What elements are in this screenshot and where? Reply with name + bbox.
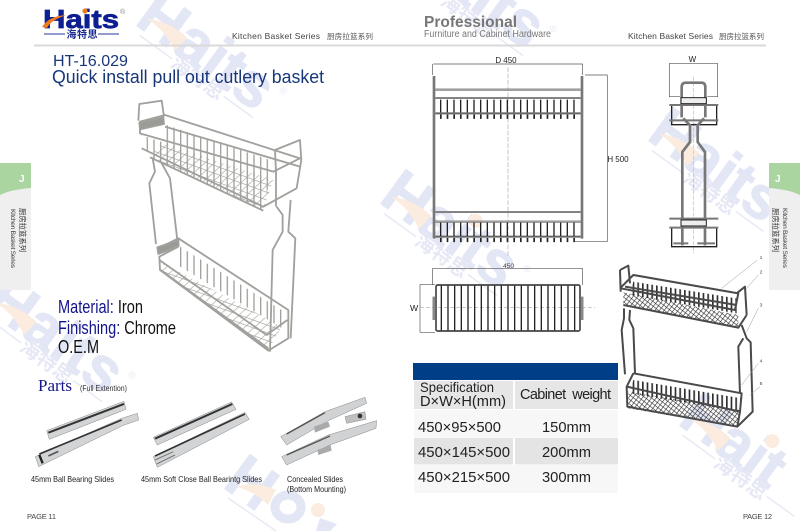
specification table: 450×215×500 [418, 469, 510, 486]
watermark: bottom left page: H [213, 442, 290, 524]
table header band [413, 363, 618, 380]
material list: Material: Iron [58, 297, 143, 317]
logo: Haits [42, 4, 126, 41]
side tab: left: Kitchen Basket Series [9, 209, 16, 269]
drawing: side view: W [689, 55, 697, 64]
watermark: top centre: 海特思 [167, 51, 229, 105]
parts heading: (Full Extention) [80, 383, 127, 393]
part captions: 45mm Ball Bearing Slides [31, 474, 114, 484]
header: right series label [628, 31, 764, 41]
specification table: 200mm [542, 444, 591, 461]
drawing: front view: H 500 [607, 155, 629, 164]
drawing: isometric view with numbered parts: 2 [760, 269, 763, 275]
header: Professional: Professional [424, 14, 517, 31]
part: 45mm soft close slides [153, 402, 249, 467]
specification table: Specification [420, 379, 494, 395]
drawing: isometric view with numbered parts: 5 [760, 381, 763, 387]
watermark: bottom left page [213, 442, 337, 531]
page number: 11: PAGE 11 [27, 512, 56, 521]
side tab: left: 厨房拉篮系列 [18, 208, 27, 252]
header rule [34, 44, 766, 46]
logo: Haits: Haits [43, 4, 119, 34]
side tab: right: Kitchen Basket Series [781, 208, 788, 269]
title [52, 53, 324, 87]
drawing: isometric view with numbered parts [620, 255, 763, 427]
part: 45mm ball bearing slides [35, 401, 139, 467]
part captions: (Bottom Mounting) [287, 484, 346, 494]
drawing: isometric view with numbered parts: 3 [760, 303, 763, 309]
watermark: bottom right page: Hait [669, 380, 800, 501]
title: HT-16.029 [53, 53, 128, 70]
material list [58, 297, 176, 357]
part captions: Concealed Slides [287, 474, 343, 484]
header: Professional: Furniture and Cabinet Hardware [424, 29, 551, 40]
watermark: upper right: 海特思 [679, 166, 741, 220]
watermark: left: 海特思 [16, 335, 78, 389]
watermark: middle right page: Haits [369, 157, 532, 302]
header: right series label: Kitchen Basket Series [628, 31, 713, 41]
specification table: 150mm [542, 419, 591, 436]
header: left series label [232, 31, 373, 41]
parts heading [38, 376, 127, 395]
page number: 12: PAGE 12 [743, 512, 772, 521]
parts heading: Parts [38, 376, 72, 395]
drawing: isometric view with numbered parts: 4 [760, 359, 763, 365]
header: right series label: 厨房拉篮系列 [719, 31, 764, 41]
drawing: front view [433, 56, 629, 257]
drawing: side view [669, 55, 718, 253]
header: Professional [424, 14, 551, 40]
title: Quick install pull out cutlery basket [52, 66, 324, 87]
material list: Finishing: Chrome [58, 318, 176, 338]
side tab: right: J [775, 174, 781, 185]
material list: O.E.M [58, 337, 99, 357]
logo: Haits: ® [120, 8, 126, 16]
watermark: left: ® [125, 369, 138, 383]
part captions: 45mm Soft Close Ball Bearintg Slides [141, 474, 262, 484]
drawing: top view: W [410, 303, 419, 313]
leader lines [722, 260, 760, 395]
drawing: top view: 450 [503, 263, 514, 270]
watermark: middle right page: 海特思 [411, 229, 473, 283]
part: concealed slides [281, 397, 377, 465]
logo: Haits: 海特思 [66, 28, 98, 41]
side tab: left: J [19, 174, 25, 185]
watermark: upper right: Haits [638, 95, 796, 235]
specification table: 300mm [542, 469, 591, 486]
specification table: 450×95×500 [418, 419, 501, 436]
drawing: top view [410, 263, 595, 332]
watermark: bottom right page: 海特思 [710, 451, 772, 505]
watermark: top centre: ® [276, 85, 289, 99]
specification table: Cabinet weight [520, 387, 611, 403]
drawing: front view: D 450 [495, 56, 517, 65]
specification table: D×W×H(mm) [420, 394, 506, 410]
watermark: middle right page: ® [520, 263, 533, 277]
side tab: left [0, 163, 31, 290]
header: left series label: Kitchen Basket Series [232, 31, 320, 41]
side tab: right: 厨房拉篮系列 [771, 208, 780, 252]
header: left series label: 厨房拉篮系列 [327, 31, 373, 41]
watermark: top of right page: ® [546, 23, 559, 37]
specification table: 450×145×500 [418, 444, 510, 461]
part numbers: 1 [760, 255, 763, 261]
specification table [413, 363, 618, 493]
part captions [31, 474, 346, 494]
product photo: cutlery basket [138, 101, 301, 352]
side tab: right [769, 163, 800, 290]
